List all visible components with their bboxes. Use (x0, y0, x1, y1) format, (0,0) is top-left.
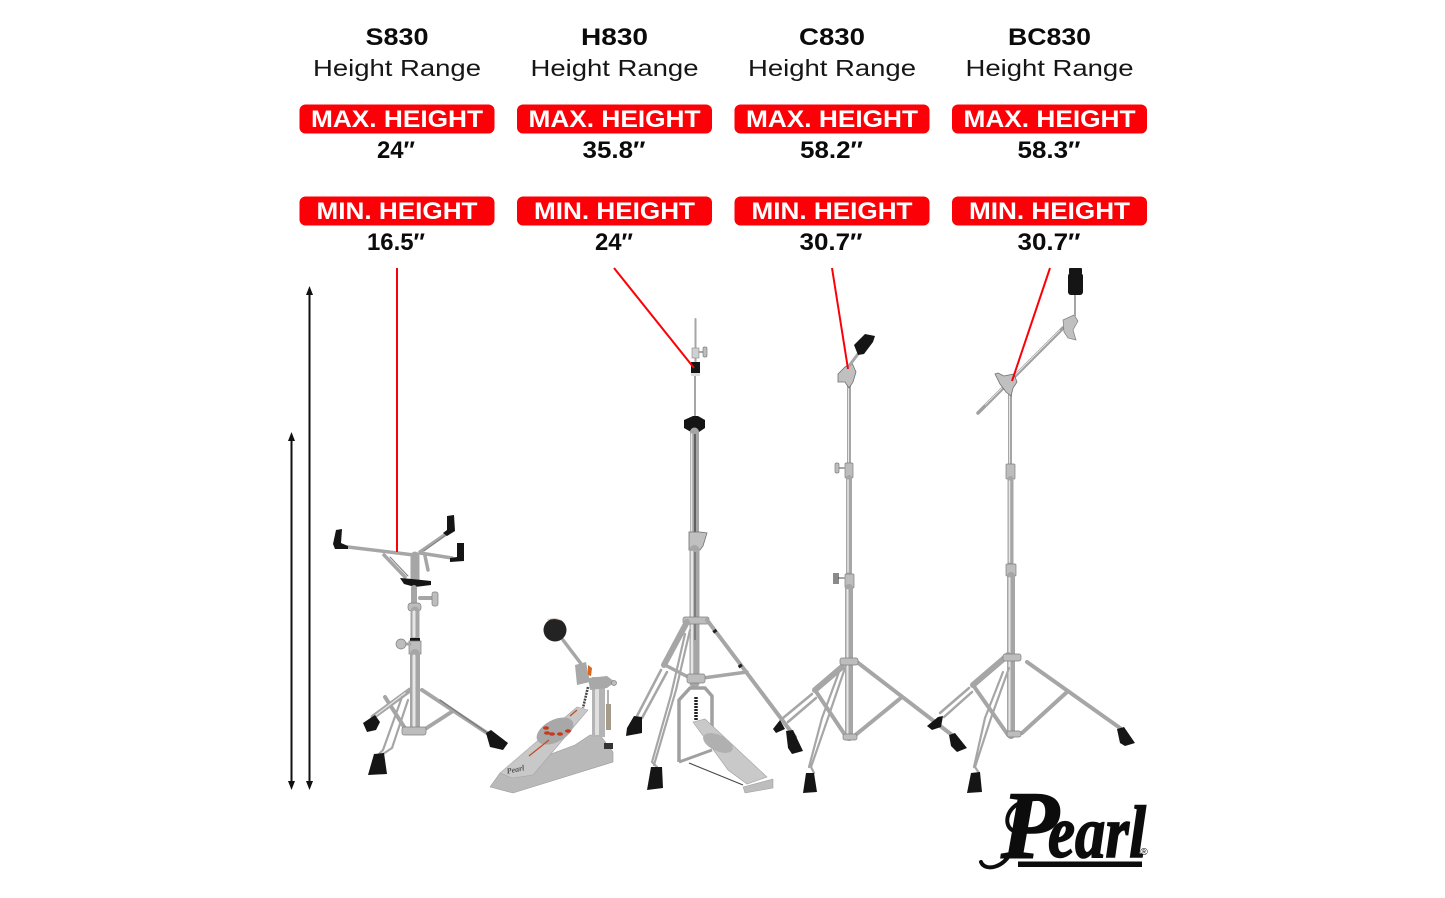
heading: H830: H830 (581, 24, 648, 51)
leader line: BC830 (1012, 268, 1050, 381)
subheading: H830 height range: Height Range (530, 55, 698, 81)
value: H830 min height: 24″ (595, 229, 633, 256)
heading: C830: C830 (799, 24, 865, 51)
illustration: S830 snare stand (333, 515, 508, 775)
illustration: bass drum pedal (490, 618, 616, 793)
leader line: C830 (832, 268, 848, 369)
subheading: S830 height range: Height Range (313, 55, 481, 81)
value: H830 max height: 35.8″ (582, 137, 646, 164)
heading: S830: S830 (366, 24, 428, 51)
heading: BC830: BC830 (1008, 24, 1091, 51)
value: BC830 min height: 30.7″ (1018, 229, 1081, 256)
illustration: BC830 boom cymbal stand (927, 268, 1135, 793)
logo: Pearl: ® (1140, 847, 1148, 858)
arrow: min height span (288, 432, 295, 790)
leader line: S830 (396, 268, 398, 552)
badge: C830 min height: MIN. HEIGHT (752, 198, 913, 225)
value: BC830 max height: 58.3″ (1018, 137, 1081, 164)
illustration: H830 hi-hat stand (626, 319, 803, 793)
value: C830 max height: 58.2″ (800, 137, 864, 164)
badge: BC830 max height: MAX. HEIGHT (964, 106, 1136, 133)
badge: S830 max height: MAX. HEIGHT (311, 106, 483, 133)
subheading: BC830 height range: Height Range (966, 55, 1134, 81)
leader line: H830 (614, 268, 694, 368)
badge: BC830 min height: MIN. HEIGHT (969, 198, 1130, 225)
value: C830 min height: 30.7″ (800, 229, 863, 256)
badge: H830 min height: MIN. HEIGHT (534, 198, 695, 225)
logo: Pearl: P (1000, 772, 1060, 879)
column: S830 specs (300, 24, 494, 256)
logo: Pearl (981, 772, 1148, 879)
column: C830 specs (734, 24, 930, 256)
illustration: C830 cymbal stand (773, 334, 967, 793)
column: BC830 specs (952, 24, 1147, 256)
badge: H830 max height: MAX. HEIGHT (528, 106, 701, 133)
subheading: C830 height range: Height Range (748, 55, 916, 81)
logo: Pearl: earl (1048, 792, 1146, 874)
value: S830 min height: 16.5″ (367, 229, 425, 256)
badge: S830 min height: MIN. HEIGHT (316, 198, 478, 225)
column: H830 specs (517, 24, 712, 256)
value: S830 max height: 24″ (377, 137, 415, 164)
badge: C830 max height: MAX. HEIGHT (746, 106, 918, 133)
illustration: bass drum pedal: Pearl (506, 763, 526, 776)
arrow: max height span (306, 286, 313, 790)
